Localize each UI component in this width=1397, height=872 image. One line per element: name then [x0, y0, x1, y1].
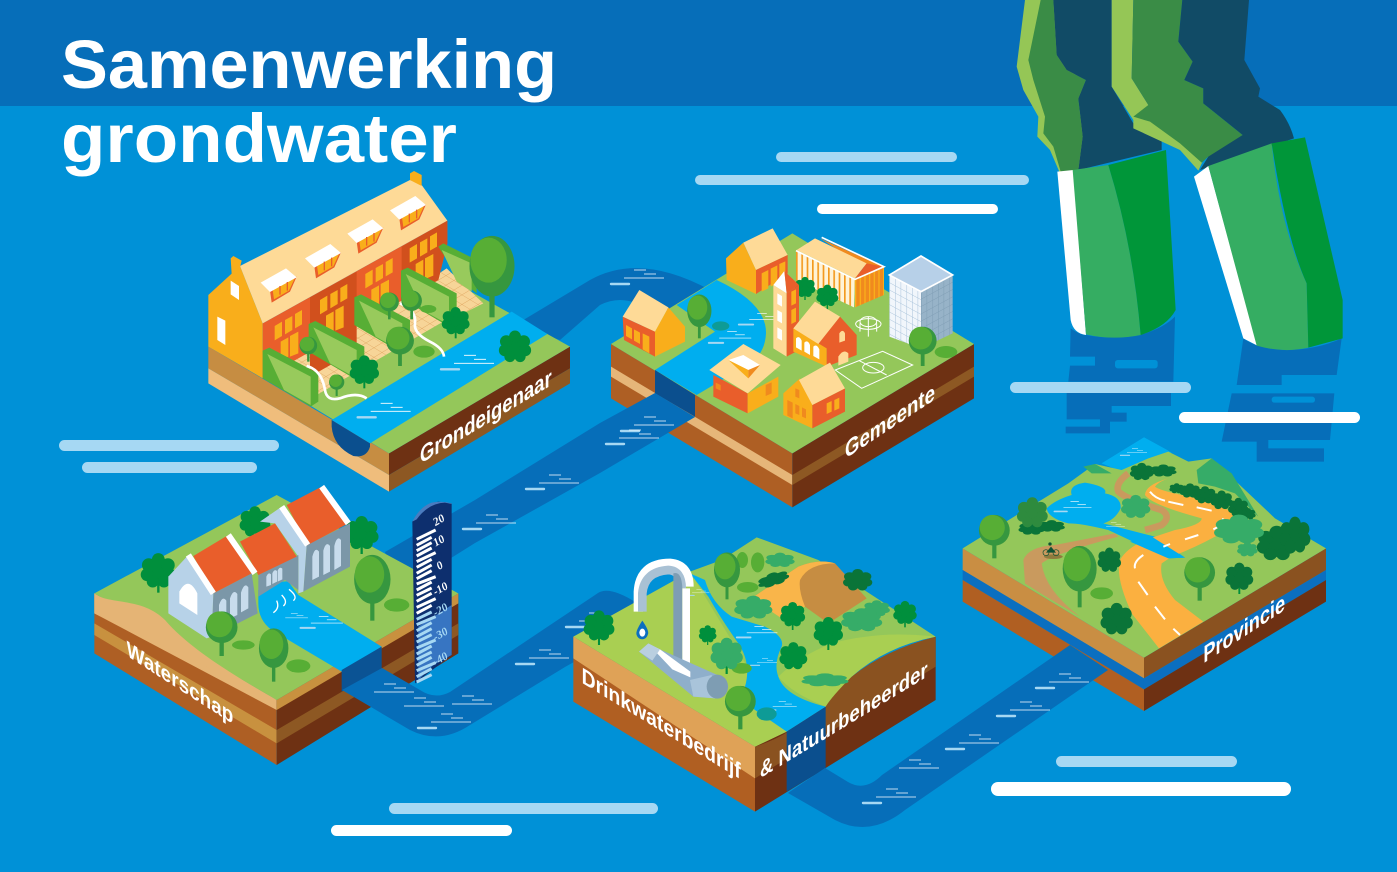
- panel: Gemeente: [611, 228, 974, 507]
- peninsula tree: [687, 294, 729, 338]
- soil layers: [94, 593, 458, 765]
- ripples: [1054, 448, 1147, 526]
- label: Drinkwaterbedrijf: Drinkwaterbedrijf: [582, 662, 741, 785]
- road markings: [1135, 492, 1223, 635]
- panel: Grondeigenaar: [208, 171, 570, 492]
- title: grondwater: [61, 100, 457, 177]
- stream cross-section: [787, 707, 826, 792]
- background trees: [141, 506, 379, 593]
- garden trees: [300, 236, 531, 396]
- panel: Waterschap: [94, 487, 458, 765]
- soil layers: [611, 344, 974, 507]
- river: [655, 280, 766, 395]
- right boot: [1194, 137, 1343, 350]
- gauge numbers: -20: [431, 601, 451, 619]
- decorative speed lines: [59, 152, 1291, 836]
- ripples: [686, 589, 797, 710]
- garden hedges: [263, 243, 477, 407]
- dirt path: [1023, 473, 1167, 617]
- water downpipes: [307, 303, 444, 399]
- label: Waterschap: Waterschap: [127, 636, 233, 729]
- vegetation: [584, 552, 917, 729]
- grass west: [573, 572, 787, 747]
- winding road: [1119, 478, 1242, 648]
- stream: [690, 573, 826, 732]
- school building: [796, 237, 884, 307]
- soil layers: [208, 347, 570, 492]
- panel: Provincie: [963, 437, 1326, 711]
- river cross-section: [655, 370, 695, 417]
- soccer field: [835, 351, 913, 388]
- soil layers: [573, 637, 936, 812]
- ditch cross-section: [332, 420, 370, 456]
- cyclist: [1043, 542, 1063, 559]
- lobe of grass in front: [778, 634, 936, 707]
- gauge numbers: [430, 512, 451, 668]
- hills: [1083, 437, 1258, 517]
- outflow channel: [258, 581, 382, 672]
- ripples: [358, 355, 494, 417]
- gauge numbers: 0: [434, 559, 446, 573]
- soil layers: [963, 548, 1326, 711]
- dormers: [261, 196, 426, 303]
- canal: Waterschap to Drinkwaterbedrijf: [342, 591, 640, 736]
- label: Natuurbeheerder: & Natuurbeheerder: [760, 655, 928, 783]
- church: [793, 302, 857, 367]
- house: low with dormer: [709, 344, 781, 413]
- canal: Gemeente to Waterschap: [385, 393, 695, 590]
- water curls and ripples: [273, 589, 343, 628]
- gauge numbers: -40: [431, 650, 451, 668]
- label: Grondeigenaar: Grondeigenaar: [420, 364, 552, 470]
- church tower: [773, 271, 799, 357]
- grass east: [690, 537, 936, 747]
- office tower: [889, 256, 953, 348]
- grass: [263, 273, 570, 453]
- house: front: [783, 363, 845, 428]
- back water: [1102, 437, 1172, 473]
- foreground trees: [206, 555, 409, 682]
- label: Gemeente: Gemeente: [845, 378, 935, 465]
- left boot: [1057, 150, 1176, 338]
- speed lines over reflection: [1010, 382, 1360, 423]
- terraced row houses: [208, 171, 447, 378]
- canal: Drinkwaterbedrijf to Provincie: [788, 645, 1108, 827]
- gauge numbers: 10: [431, 533, 447, 549]
- trousers: [1017, 0, 1294, 173]
- playground climbing frame: [856, 317, 881, 337]
- stream overlay: [1130, 537, 1185, 558]
- paved yards: [293, 268, 483, 395]
- gauge body: [412, 502, 452, 683]
- pumping station: [168, 487, 350, 638]
- lake and stream: [1047, 483, 1185, 558]
- label: Provincie: Provincie: [1203, 589, 1285, 669]
- trees behind tower: [795, 277, 838, 309]
- house: back left: [726, 228, 788, 294]
- title: Samenwerking: [61, 26, 557, 103]
- water level gauge: [412, 502, 452, 683]
- ripples: [709, 313, 781, 343]
- canal: Grondeigenaar to Gemeente: [515, 268, 710, 340]
- sand: [94, 593, 277, 700]
- gauge numbers: -10: [431, 580, 451, 598]
- grass: [611, 233, 974, 453]
- legs with rain boots: [1017, 0, 1343, 462]
- grass: [94, 495, 458, 700]
- tree at tower: [909, 327, 957, 366]
- gauge numbers: -30: [431, 625, 451, 644]
- water drop: [636, 621, 648, 639]
- house: peninsula: [623, 290, 685, 357]
- bushes and trees: [979, 463, 1310, 634]
- landscape base: [963, 452, 1326, 658]
- water reflection of boots: [1066, 317, 1342, 462]
- ditch: [332, 312, 547, 443]
- tick marks: [417, 530, 436, 682]
- channel cross-section: [342, 647, 382, 692]
- faucet pipe: [638, 563, 728, 699]
- header band: [0, 0, 1397, 106]
- title: [61, 26, 557, 177]
- hill: [752, 561, 867, 623]
- panel: Drinkwaterbedrijf en Natuurbeheerder: [573, 537, 936, 812]
- gauge numbers: 20: [430, 512, 447, 529]
